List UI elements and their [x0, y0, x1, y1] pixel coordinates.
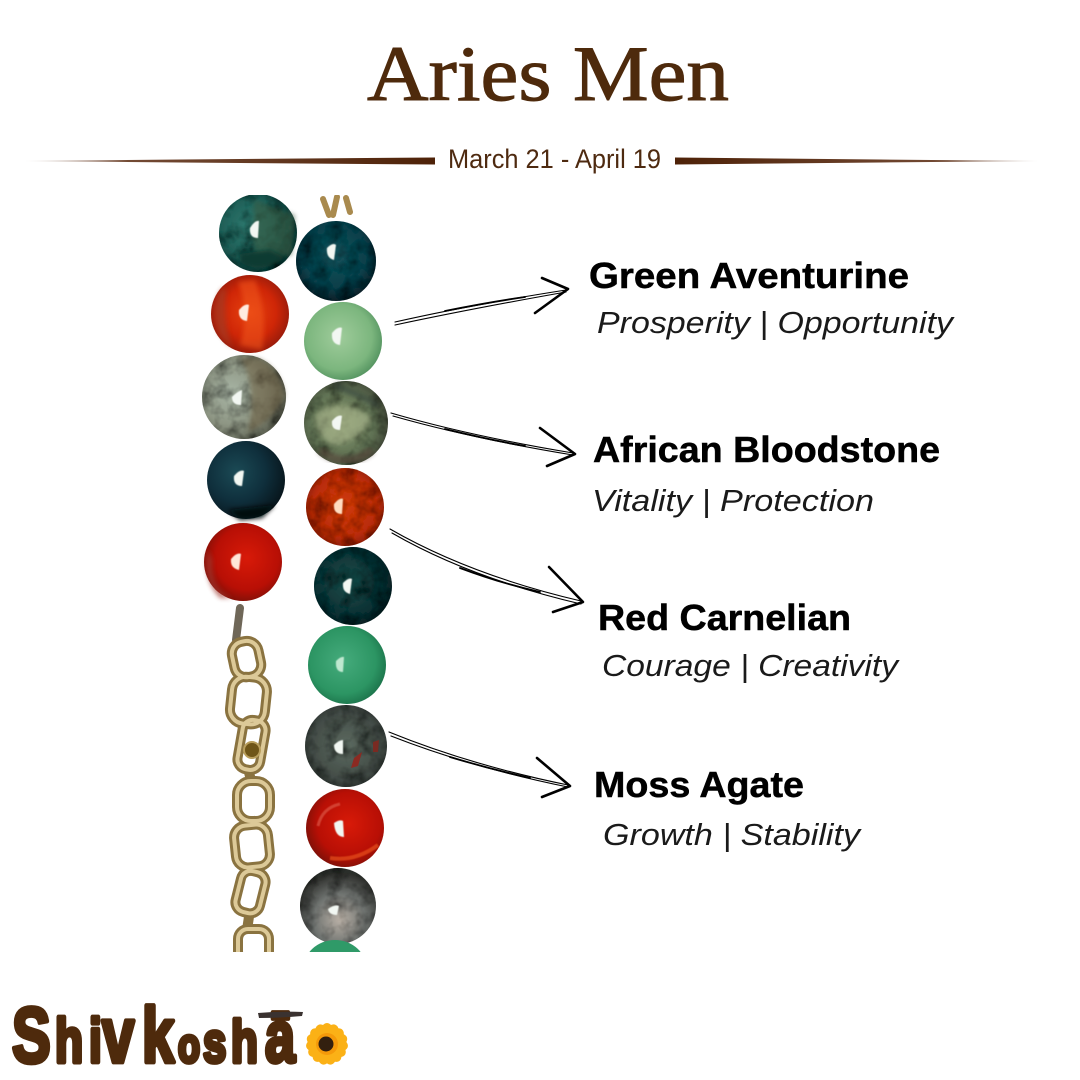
label: Red Carnelian: Red Carnelian — [598, 597, 851, 638]
label: African Bloodstone — [592, 429, 940, 518]
divider with date — [25, 144, 1038, 174]
chain — [229, 608, 271, 961]
arrow 2 — [391, 413, 575, 466]
title: Aries Men — [367, 30, 729, 117]
right strand beads — [296, 221, 392, 1000]
logo: Shivkosha: o — [178, 1019, 200, 1073]
label: Red Carnelian: Courage | Creativity — [602, 648, 901, 683]
label: Moss Agate: Growth | Stability — [603, 817, 863, 852]
logo: Shivkosha: k — [142, 992, 175, 1079]
macron brush stroke — [258, 1012, 303, 1018]
icon: sunflower — [305, 1022, 349, 1066]
arrow 3 — [390, 529, 583, 612]
label: Green Aventurine: Prosperity | Opportunity — [597, 305, 956, 340]
logo: Shivkosha: i — [89, 1006, 102, 1076]
logo: Shivkosha: h — [231, 1010, 258, 1076]
logo: Shivkosha: v — [102, 992, 135, 1079]
label: Moss Agate: Moss Agate — [594, 764, 804, 805]
logo: Shivkosha: ā — [265, 996, 296, 1078]
label: Green Aventurine — [589, 255, 956, 340]
gold clasp top — [323, 197, 350, 215]
logo: Shivkosha — [12, 992, 349, 1079]
bead bracelet photo — [202, 194, 392, 1000]
logo: Shivkosha: S — [12, 992, 51, 1079]
arrow 4 — [389, 732, 570, 797]
label: African Bloodstone: Vitality | Protection — [592, 483, 874, 518]
logo: Shivkosha: h — [55, 1006, 83, 1076]
label: Moss Agate — [594, 764, 863, 852]
date range: March 21 - April 19 — [448, 144, 661, 174]
label: Red Carnelian — [598, 597, 901, 683]
label: Green Aventurine: Green Aventurine — [589, 255, 909, 296]
arrow 1 — [395, 278, 568, 325]
bead highlights — [231, 221, 352, 915]
left strand beads — [202, 194, 297, 601]
label: African Bloodstone: African Bloodstone — [593, 429, 940, 470]
logo: Shivkosha: s — [203, 1011, 226, 1075]
